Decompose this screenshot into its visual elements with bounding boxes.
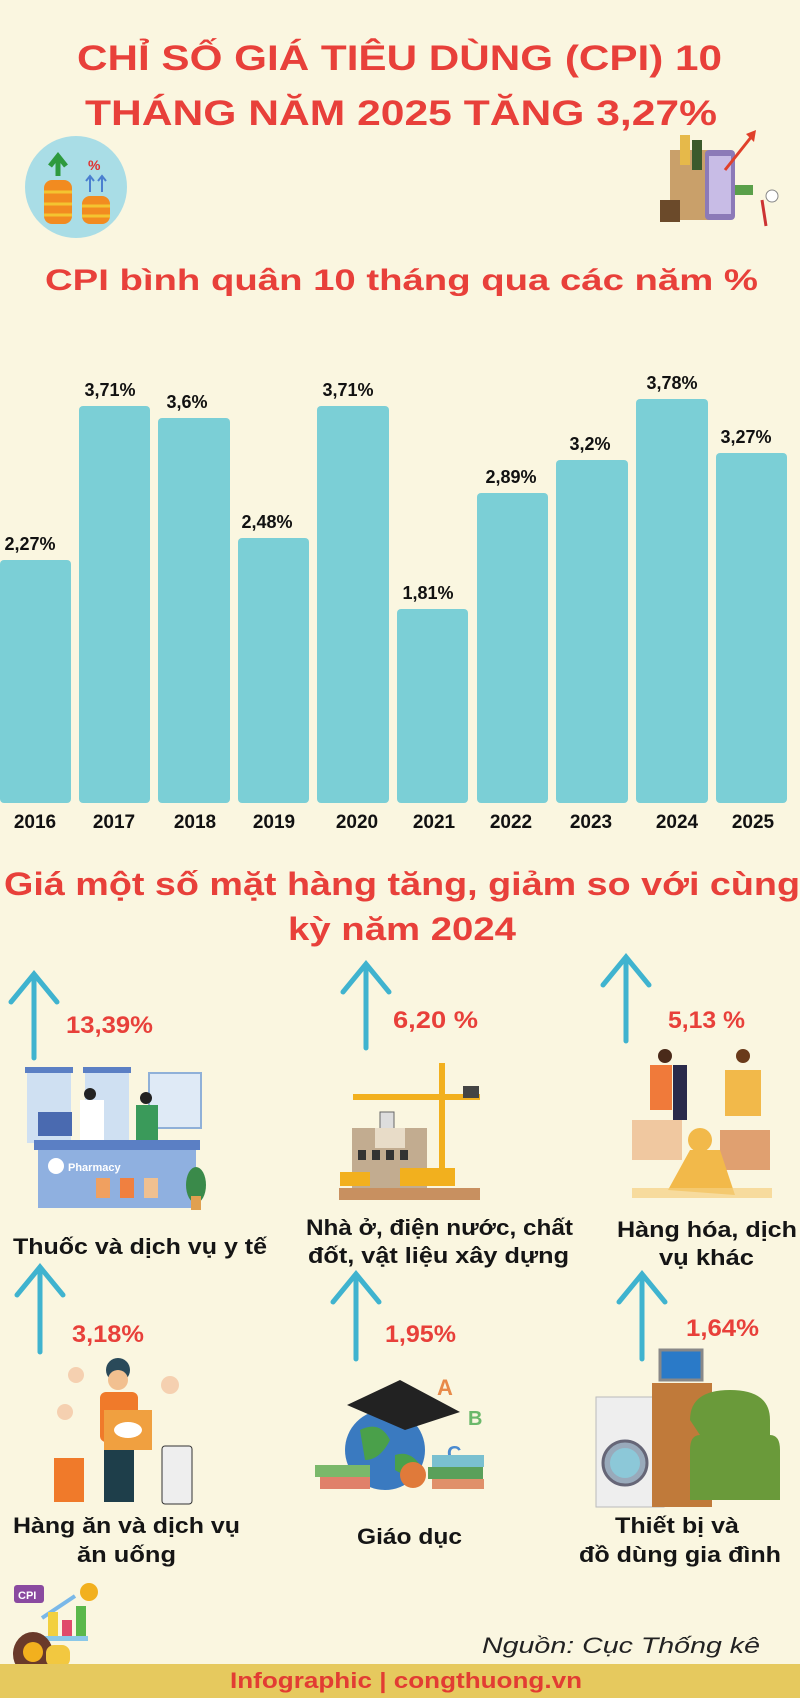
bar chart: 3,6%: [166, 392, 208, 412]
category label: food services: ăn uống: [77, 1542, 176, 1567]
bar chart: 2016: [14, 812, 56, 833]
percent labels: 13,39%: [66, 1012, 153, 1039]
percent labels: 3,18%: [72, 1321, 144, 1348]
icon: coins with arrows: %: [88, 157, 101, 173]
icon: food delivery: [54, 1358, 192, 1504]
percent labels: 1,95%: [385, 1321, 456, 1348]
category label: housing: Nhà ở, điện nước, chất: [306, 1215, 574, 1240]
heading: price changes: kỳ năm 2024: [288, 911, 516, 947]
source: Nguồn: Cục Thống kê: [482, 1633, 760, 1658]
icon: education globe: A: [437, 1375, 453, 1400]
icon: pharmacy: Pharmacy: [68, 1162, 121, 1174]
icon: CPI money bag: CPI: [18, 1590, 36, 1602]
heading: price changes: Giá một số mặt hàng tăng, giảm so với cùng: [4, 866, 800, 902]
icon: shopping bag and phone: [660, 130, 778, 226]
bar chart: 1,81%: [402, 583, 454, 603]
category label: medicine: Thuốc và dịch vụ y tế: [13, 1234, 268, 1259]
icon: clothes shopping: [632, 1049, 772, 1198]
icon: pharmacy: [25, 1067, 206, 1210]
bar chart: 3,2%: [569, 434, 611, 454]
bar chart: 3,78%: [646, 373, 698, 393]
arrows: up: [11, 957, 665, 1359]
bar chart: 2025: [732, 812, 775, 833]
category label: other goods: [617, 1217, 797, 1270]
bar chart: 2017: [93, 812, 135, 833]
bar chart: 2023: [570, 812, 612, 833]
footer: Infographic | congthuong.vn: [230, 1668, 582, 1693]
category label: other goods: vụ khác: [659, 1245, 754, 1270]
subtitle: chart heading: CPI bình quân 10 tháng qua các năm %: [45, 264, 758, 297]
bar chart: 2019: [253, 812, 295, 833]
bar chart: 2018: [174, 812, 216, 833]
icon: education globe: [315, 1375, 484, 1490]
bar chart: 2022: [490, 812, 532, 833]
bar chart: 3,71%: [322, 380, 374, 400]
category label: household: đồ dùng gia đình: [579, 1542, 781, 1567]
percent labels: 1,64%: [686, 1315, 759, 1342]
bar chart: 2020: [336, 812, 378, 833]
title: THÁNG NĂM 2025 TĂNG 3,27%: [85, 93, 717, 133]
bar chart: 2,48%: [241, 512, 293, 532]
icon: construction: [339, 1063, 480, 1200]
title: CHỈ SỐ GIÁ TIÊU DÙNG (CPI) 10: [77, 38, 722, 78]
icon: coins with arrows: [25, 136, 127, 238]
bar chart: 3,71%: [84, 380, 136, 400]
category label: housing: [306, 1215, 574, 1268]
percent labels: 6,20 %: [393, 1007, 478, 1034]
icon: education globe: B: [468, 1408, 482, 1430]
category label: other goods: Hàng hóa, dịch: [617, 1217, 797, 1242]
icon: CPI money bag: [13, 1583, 98, 1676]
title: [77, 38, 722, 133]
icon: household appliances: [596, 1350, 780, 1507]
bar chart: 2,27%: [4, 534, 56, 554]
category label: household: [579, 1513, 781, 1567]
bar chart: 2021: [413, 812, 456, 833]
bar chart: [0, 373, 787, 833]
category label: household: Thiết bị và: [615, 1513, 740, 1538]
category label: food services: Hàng ăn và dịch vụ: [13, 1513, 240, 1538]
bar chart: 3,27%: [720, 427, 772, 447]
category label: food services: [13, 1513, 240, 1567]
category label: education: Giáo dục: [357, 1524, 462, 1549]
bar chart: 2024: [656, 812, 699, 833]
bar chart: 2,89%: [485, 467, 537, 487]
footer: [0, 1664, 800, 1698]
category label: housing: đốt, vật liệu xây dựng: [308, 1243, 569, 1268]
heading: price changes: [4, 866, 800, 947]
percent labels: [66, 1007, 759, 1348]
percent labels: 5,13 %: [668, 1007, 745, 1034]
icon: education globe: C: [447, 1443, 461, 1465]
